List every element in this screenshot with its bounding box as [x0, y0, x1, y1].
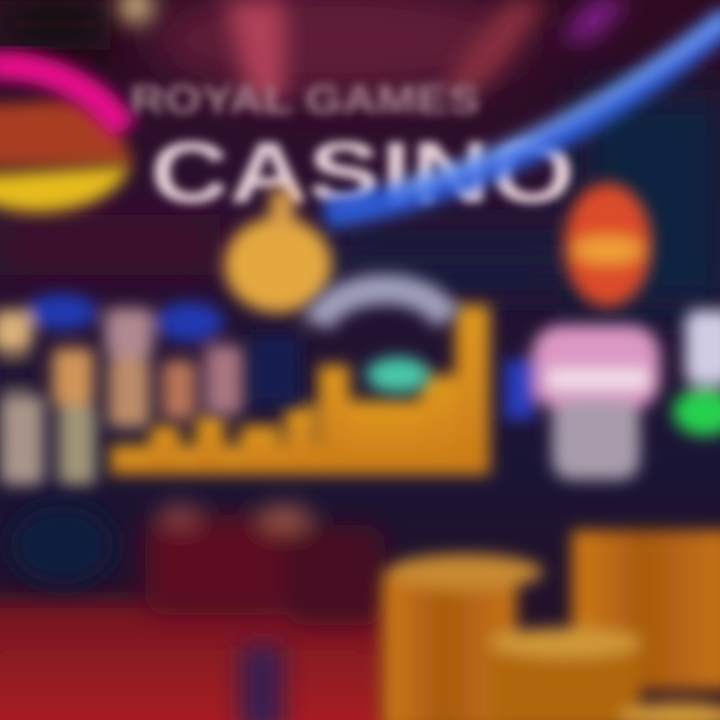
small title line: ROYAL GAMES — [130, 78, 480, 122]
ceiling glow — [0, 0, 720, 310]
left block — [382, 572, 517, 720]
gauge arc above chart — [250, 289, 448, 405]
blue machine tops — [26, 294, 98, 330]
title — [130, 78, 575, 221]
seating — [10, 505, 385, 720]
neon burger sign — [0, 66, 132, 212]
burger body — [0, 100, 132, 168]
floor — [0, 600, 390, 720]
front block — [492, 640, 640, 720]
gold bar chart — [110, 305, 490, 475]
magenta arc — [0, 66, 124, 130]
gold ball — [224, 190, 332, 313]
yellow bun — [0, 165, 130, 212]
orange podium blocks — [382, 530, 720, 720]
bottom right block — [620, 702, 720, 720]
orange balloon — [564, 183, 652, 307]
ceiling streaks — [119, 0, 630, 100]
slot machines row — [0, 294, 243, 485]
right edge machine — [673, 310, 720, 436]
back right block — [572, 530, 720, 690]
slot machine columns — [0, 310, 32, 352]
main title: CASINO — [150, 125, 575, 221]
blue neon arc — [325, 14, 720, 214]
pink robot machine — [505, 325, 660, 480]
